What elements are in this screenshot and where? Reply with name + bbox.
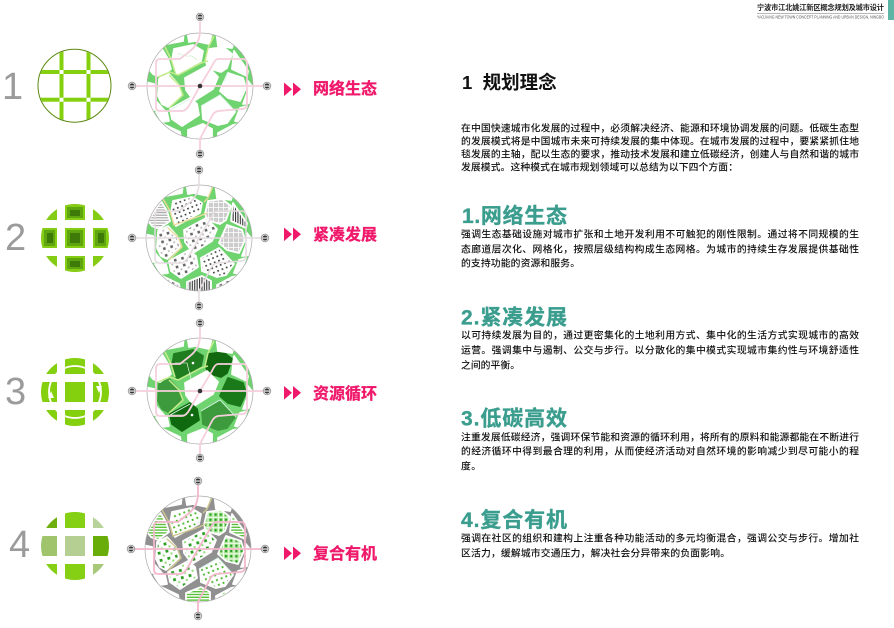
map: mixed organic blocks	[127, 477, 269, 620]
corner tab	[888, 0, 894, 20]
section body 3	[461, 430, 859, 472]
arrow	[284, 82, 301, 96]
icon: nested density blocks	[41, 204, 109, 272]
icon: circle with green grid	[38, 49, 112, 123]
section body 3: 度。	[461, 460, 481, 472]
section heading 3: 3.低碳高效	[461, 406, 567, 430]
section body 1	[461, 228, 859, 270]
section body 1: 态廊道层次化、网格化，按照层级结构构成生态网格。为城市的持续生存发展提供基础性	[461, 242, 859, 256]
section body 2: 之间的平衡。	[461, 358, 520, 372]
section 4: mixed organic	[461, 509, 859, 560]
text block: introduction: 的发展模式将是中国城市未来可持续发展的集中体现。在城市发展的过程中，要紧紧抓住地	[461, 134, 859, 148]
text block: introduction: 毯发展的主轴，配以生态的要求，推动技术发展和建立低碳经济，创建人与自然和谐的城市	[461, 148, 859, 160]
section body 4: 强调在社区的组织和建构上注重各种功能活动的多元均衡混合，强调公交与步行。增加社	[461, 532, 859, 544]
heading: planning concept: 1 规划理念	[462, 72, 557, 93]
section body 4	[461, 532, 859, 560]
section heading 1: 1.网络生态	[462, 204, 567, 228]
section body 1: 的支持功能的资源和服务。	[461, 256, 580, 270]
section 1: network ecology	[461, 204, 859, 270]
header: project title	[757, 3, 884, 20]
text block: introduction: 在中国快速城市化发展的过程中，必须解决经济、能源和环境协调发展的问题。低碳生态型	[461, 122, 859, 134]
row 1: network ecology	[2, 13, 377, 158]
number 3: 3	[5, 371, 26, 413]
header: project title: 宁波市江北姚江新区概念规划及城市设计	[757, 3, 884, 12]
icon: cycle blocks with ring	[41, 358, 109, 426]
number 4: 4	[9, 524, 30, 566]
section body 2	[461, 328, 859, 372]
section body 4: 区活力，缓解城市交通压力，解决社会分异带来的负面影响。	[461, 546, 730, 560]
section body 3: 注重发展低碳经济，强调环保节能和资源的循环利用，将所有的原料和能源都能在不断进行	[461, 430, 859, 444]
icon: mixed-tone blocks	[41, 512, 109, 580]
section heading 4: 4.复合有机	[461, 509, 567, 532]
arrow	[284, 386, 301, 400]
section body 2: 运营。强调集中与遏制、公交与步行。以分散化的集中模式实现城市集约性与环境舒适性	[461, 344, 859, 356]
map: resource cycling	[128, 319, 271, 462]
label: 资源循环	[313, 385, 377, 403]
arrow	[284, 228, 301, 241]
label: 紧凑发展	[313, 225, 377, 244]
number 1: 1	[2, 66, 23, 108]
section 3: low carbon efficiency	[461, 406, 859, 472]
section body 1: 强调生态基础设施对城市扩张和土地开发利用不可触犯的刚性限制。通过将不同规模的生	[461, 228, 859, 240]
arrow	[284, 546, 301, 560]
label: 网络生态	[313, 79, 377, 98]
section 2: compact development	[461, 306, 859, 372]
section body 3: 的经济循环中得到最合理的利用，从而使经济活动对自然环境的影响减少到尽可能小的程	[461, 444, 859, 458]
section heading 2: 2.紧凑发展	[461, 306, 567, 330]
section body 2: 以可持续发展为目的，通过更密集化的土地利用方式、集中化的生活方式实现城市的高效	[461, 328, 859, 342]
map: ecological network	[128, 13, 271, 158]
row 4: mixed organic	[9, 477, 377, 620]
label: 复合有机	[313, 544, 377, 563]
row 2: compact development	[5, 166, 377, 310]
map: compact blocks	[128, 166, 269, 310]
text block: introduction: 发展模式。这种模式在城市规划领域可以总结为以下四个方面：	[461, 160, 738, 174]
number 2: 2	[5, 217, 26, 259]
row 3: resource cycling	[5, 319, 377, 462]
text block: introduction	[461, 122, 859, 174]
